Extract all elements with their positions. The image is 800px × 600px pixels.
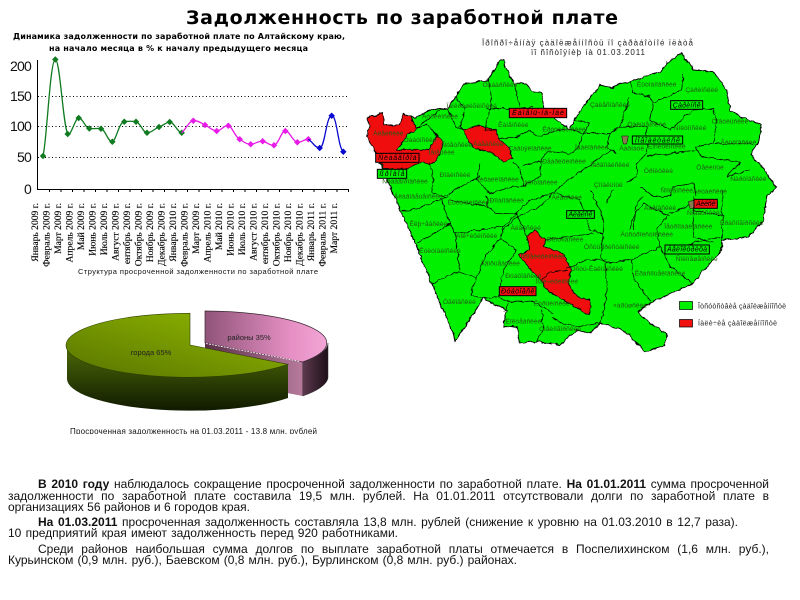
x axis labels: ентябрь 2009 г. <box>122 203 133 264</box>
district names: Êàìåíñêèé <box>498 120 529 129</box>
map title <box>482 38 694 57</box>
map shapes <box>367 53 777 352</box>
x axis labels <box>30 203 340 267</box>
district names: Çàëåñîâñêèé <box>590 101 630 109</box>
district names: Áàðíàóë <box>619 143 644 152</box>
district names: Àëåéñêèé <box>510 223 541 232</box>
text block: В 2010 году наблюдалось сокращение просроченной задолженности по заработной плате. На 01.01.2011 сумма просроченной <box>38 476 769 490</box>
pie heading: Структура просроченной задолженности по заработной плате <box>78 267 318 276</box>
city label: Biysk <box>694 199 717 208</box>
district names: Êóëóíäèíñêèé <box>448 198 489 207</box>
text block: Курьинском (0,9 млн. руб.), Баевском (0,8 млн. руб.), Бурлинском (0,8 млн. руб.) районах. <box>8 552 517 566</box>
series: 2009 <box>43 59 182 156</box>
pie label: districts: районы 35% <box>227 333 271 342</box>
city markers <box>622 136 695 208</box>
slice: cities 65% <box>66 313 288 411</box>
text block <box>8 476 769 566</box>
x axis labels: Январь 2010 г. <box>168 203 179 262</box>
district names: Ñîâåòñêèé <box>687 208 720 217</box>
district names: Óñòü-Êàëìàíñêèé <box>570 264 623 273</box>
city label: Aleysk: Àëåéñê <box>567 210 592 219</box>
district names: Êðóòèõèíñêèé <box>542 124 586 133</box>
x axis labels: Апрель 2010 г. <box>202 203 214 263</box>
district names: Òîãóëüñêèé <box>712 117 749 126</box>
city label: Biysk: Áèéñê <box>695 199 715 208</box>
district names <box>373 79 767 333</box>
district names: Åëüöîâñêèé <box>720 138 757 147</box>
x axis labels: Февраль 2011 г. <box>318 203 328 267</box>
slice: districts 35% <box>205 311 328 396</box>
district names: Ëîêòåâñêèé <box>505 318 542 326</box>
y axis labels: 50 <box>17 149 32 165</box>
x axis labels: Март 2009 г. <box>53 203 64 254</box>
map of districts <box>367 53 777 352</box>
district names: Íîâè÷èõèíñêèé <box>535 277 578 286</box>
city label: Yarovoe <box>377 169 407 178</box>
city label: Slavgorod <box>376 153 419 162</box>
district names: Àëåéñêèé <box>373 128 404 137</box>
district names: Êóðüèíñêèé <box>534 299 570 308</box>
x axis labels: Январь 2009 г. <box>30 203 41 262</box>
x axis labels: Июль 2009 г. <box>99 203 110 255</box>
district names: Ïåòðîïàâëîâñêèé <box>664 223 713 231</box>
district names: Êóëóíäèíñêèé <box>419 246 461 255</box>
district names: Óãëîâñêèé <box>443 297 476 306</box>
map legend <box>680 302 786 328</box>
district names: Òàëüìåíñêèé <box>627 120 666 129</box>
district names: Âîë÷èõèíñêèé <box>456 231 498 240</box>
pie caption: Просроченная задолженность на 01.03.2011 - 13,8 млн. рублей <box>70 427 317 436</box>
district names: Øèïóíîâñêèé <box>547 236 584 243</box>
x axis labels: Октябрь 2010 г. <box>272 203 282 266</box>
x axis labels: Июль 2010 г. <box>237 203 248 255</box>
y axis labels <box>10 58 32 197</box>
chart heading <box>13 31 345 53</box>
chart heading: Динамика задолженности по заработной плате по Алтайскому краю, <box>13 31 345 41</box>
legend: has debt: Íàëè÷èå çàäîëæåííîñòè <box>698 318 777 328</box>
city label: Zarinsk: Çàðèíñê <box>673 102 701 109</box>
district names: Êðàñíîùåêîâñêèé <box>635 269 686 278</box>
x axis labels: Июнь 2009 г. <box>88 203 98 256</box>
district names: Õàáàðñêèé <box>483 80 518 89</box>
district names: Àëòàéñêèé <box>693 187 727 196</box>
district names: Àëåéñêèé <box>551 193 582 202</box>
district names: Öåëèííûé <box>696 164 724 172</box>
district names: Òðîèöêèé <box>644 166 673 175</box>
city label: Kamen-na-Obi: Êàìåíü-íà-Îáè <box>512 108 564 117</box>
district names: Ìèõàéëîâñêèé <box>478 174 519 183</box>
map title: Ïðîñðî÷åííàÿ çàäîëæåííîñòü ïî çàðàáîòíîé ïëàòå <box>482 38 694 48</box>
legend: no debt: Îòñóòñòâèå çàäîëæåííîñòè <box>697 302 786 310</box>
x axis labels: Март 2011 г. <box>329 203 340 254</box>
x axis labels: Март 2009 г. <box>191 203 202 254</box>
district names: Ñàðòîâñêèé <box>730 174 767 183</box>
district names: Áëàãîâåùåíñêèé <box>394 192 443 201</box>
line chart <box>10 58 349 267</box>
district names: Ìàìîíòîâñêèé <box>522 178 558 187</box>
district names: Ïîñïåëèõèíñêèé <box>520 253 565 261</box>
district names: Ðîìàíîâñêèé <box>489 198 524 205</box>
district names: Ñìîëåíñêèé <box>660 186 693 195</box>
district names: Çîíàëüíûé <box>594 182 623 189</box>
x axis labels: Февраль 2009 г. <box>180 203 190 267</box>
x axis labels: Май 2010 г. <box>214 203 225 250</box>
x axis labels: Июнь 2010 г. <box>226 203 236 256</box>
district names: Áûñòðîèñòîêñêèé <box>620 230 673 239</box>
text block: задолженности по заработной плате составила 19,5 млн. рублей. На 01.01.2011 отсутствовали долги по заработной плате в <box>8 488 769 502</box>
y axis labels: 150 <box>10 88 32 104</box>
district names: Ñîëîíåøåíñêèé <box>676 254 718 263</box>
x axis labels: Май 2009 г. <box>76 203 87 250</box>
city label: Aleysk <box>567 210 594 219</box>
y axis labels: 0 <box>24 181 32 197</box>
y axis labels: 100 <box>10 118 32 134</box>
district names: Êðàñíîãîðñêèé <box>720 218 764 227</box>
district names: Òàáóíñêèé <box>404 135 437 144</box>
district names: Çìåèíîãîðñêèé <box>539 325 581 333</box>
district names: Áàåâñêèé <box>473 139 504 148</box>
district names: Ïåðâîìàéñêèé <box>591 161 630 169</box>
x axis labels: Август 2010 г. <box>248 203 260 261</box>
city label: Novoaltaysk <box>632 135 683 144</box>
district names: Ïàâëîâñêèé <box>575 144 609 152</box>
district names: ×àðûøñêèé <box>613 302 647 310</box>
pie chart <box>66 311 328 411</box>
x axis labels: Апрель 2009 г. <box>64 203 76 263</box>
district names: Ðîäèíñêèé <box>440 172 471 179</box>
district names: Ðåáðèõèíñêèé <box>542 158 586 166</box>
text block: организациях 56 районов и 6 городов края. <box>8 500 250 514</box>
y axis labels: 200 <box>10 58 32 74</box>
x axis labels: Декабрь 2009 г. <box>156 203 168 266</box>
x axis labels: Ноябрь 2010 г. <box>283 203 294 262</box>
district names: Êëþ÷åâñêèé <box>409 219 447 228</box>
district names: Êîñèõèíñêèé <box>648 142 686 151</box>
x axis labels: ентябрь 2010 г. <box>260 203 271 264</box>
text block: Среди районов наибольшая сумма долгов по выплате заработной платы отмечается в Поспелихинском (1,6 млн. руб.), <box>38 542 769 556</box>
district names: Óñòü-Ïðèñòàíñêèé <box>584 242 640 251</box>
district names: Ñóåòñêèé <box>441 140 472 149</box>
district names: Ñëàâãîðîäñêèé <box>382 177 428 186</box>
district names: Çàâüÿëîâñêèé <box>508 145 552 152</box>
city label: Kamen-na-Obi <box>509 108 567 118</box>
district names: Åãîðüåâñêèé <box>480 258 520 267</box>
district names: Êûòìàíîâñêèé <box>637 79 677 88</box>
district names: Ðóáöîâñêèé <box>505 273 542 280</box>
x axis labels: Октябрь 2009 г. <box>134 203 144 266</box>
district names: Áóðëèíñêèé <box>422 112 458 121</box>
x axis labels: Февраль 2009 г. <box>42 203 52 267</box>
city label: Rubtsovsk: Ðóáöîâñê <box>501 288 534 295</box>
x axis labels: Январь 2011 г. <box>306 203 317 261</box>
city label: Belokurikha: Áåëîêóðèõà <box>666 245 707 254</box>
title: Задолженность по заработной плате <box>186 7 618 29</box>
district names: Àäðîâñêèé <box>644 203 676 212</box>
pie label: cities: города 65% <box>131 348 172 357</box>
x axis labels: Ноябрь 2009 г. <box>145 203 156 262</box>
x axis labels: Август 2009 г. <box>110 203 122 261</box>
district names: Íåìåöêèé <box>429 148 455 157</box>
city label: Yarovoe: ßðîâîå <box>379 170 405 178</box>
district names: Ñîëòîíñêèé <box>674 123 707 132</box>
city label: Belokurikha <box>665 245 709 254</box>
series: 2010 <box>182 121 308 145</box>
series: 2011 <box>308 116 343 152</box>
city label: Slavgorod: Ñëàâãîðîä <box>378 153 417 162</box>
map title: ïî ñîñòîÿíèþ íà 01.03.2011 <box>531 48 646 57</box>
district names: Ïàíêðóøèõèíñêèé <box>446 102 497 110</box>
text block: 10 предприятий края имеют задолженность перед 920 работниками. <box>8 526 398 540</box>
x axis labels: Декабрь 2010 г. <box>294 203 306 266</box>
chart heading: на начало месяца в % к началу предыдущего месяца <box>49 44 308 53</box>
text block: На 01.03.2011 просроченная задолженность составляла 13,8 млн. рублей (снижение к уровню на 01.03.2010 в 12,7 раза). <box>38 514 738 528</box>
district names: Çàðèíñêèé <box>685 86 718 94</box>
city label: Novoaltaysk: Íîâîàëòàéñê <box>635 135 680 144</box>
